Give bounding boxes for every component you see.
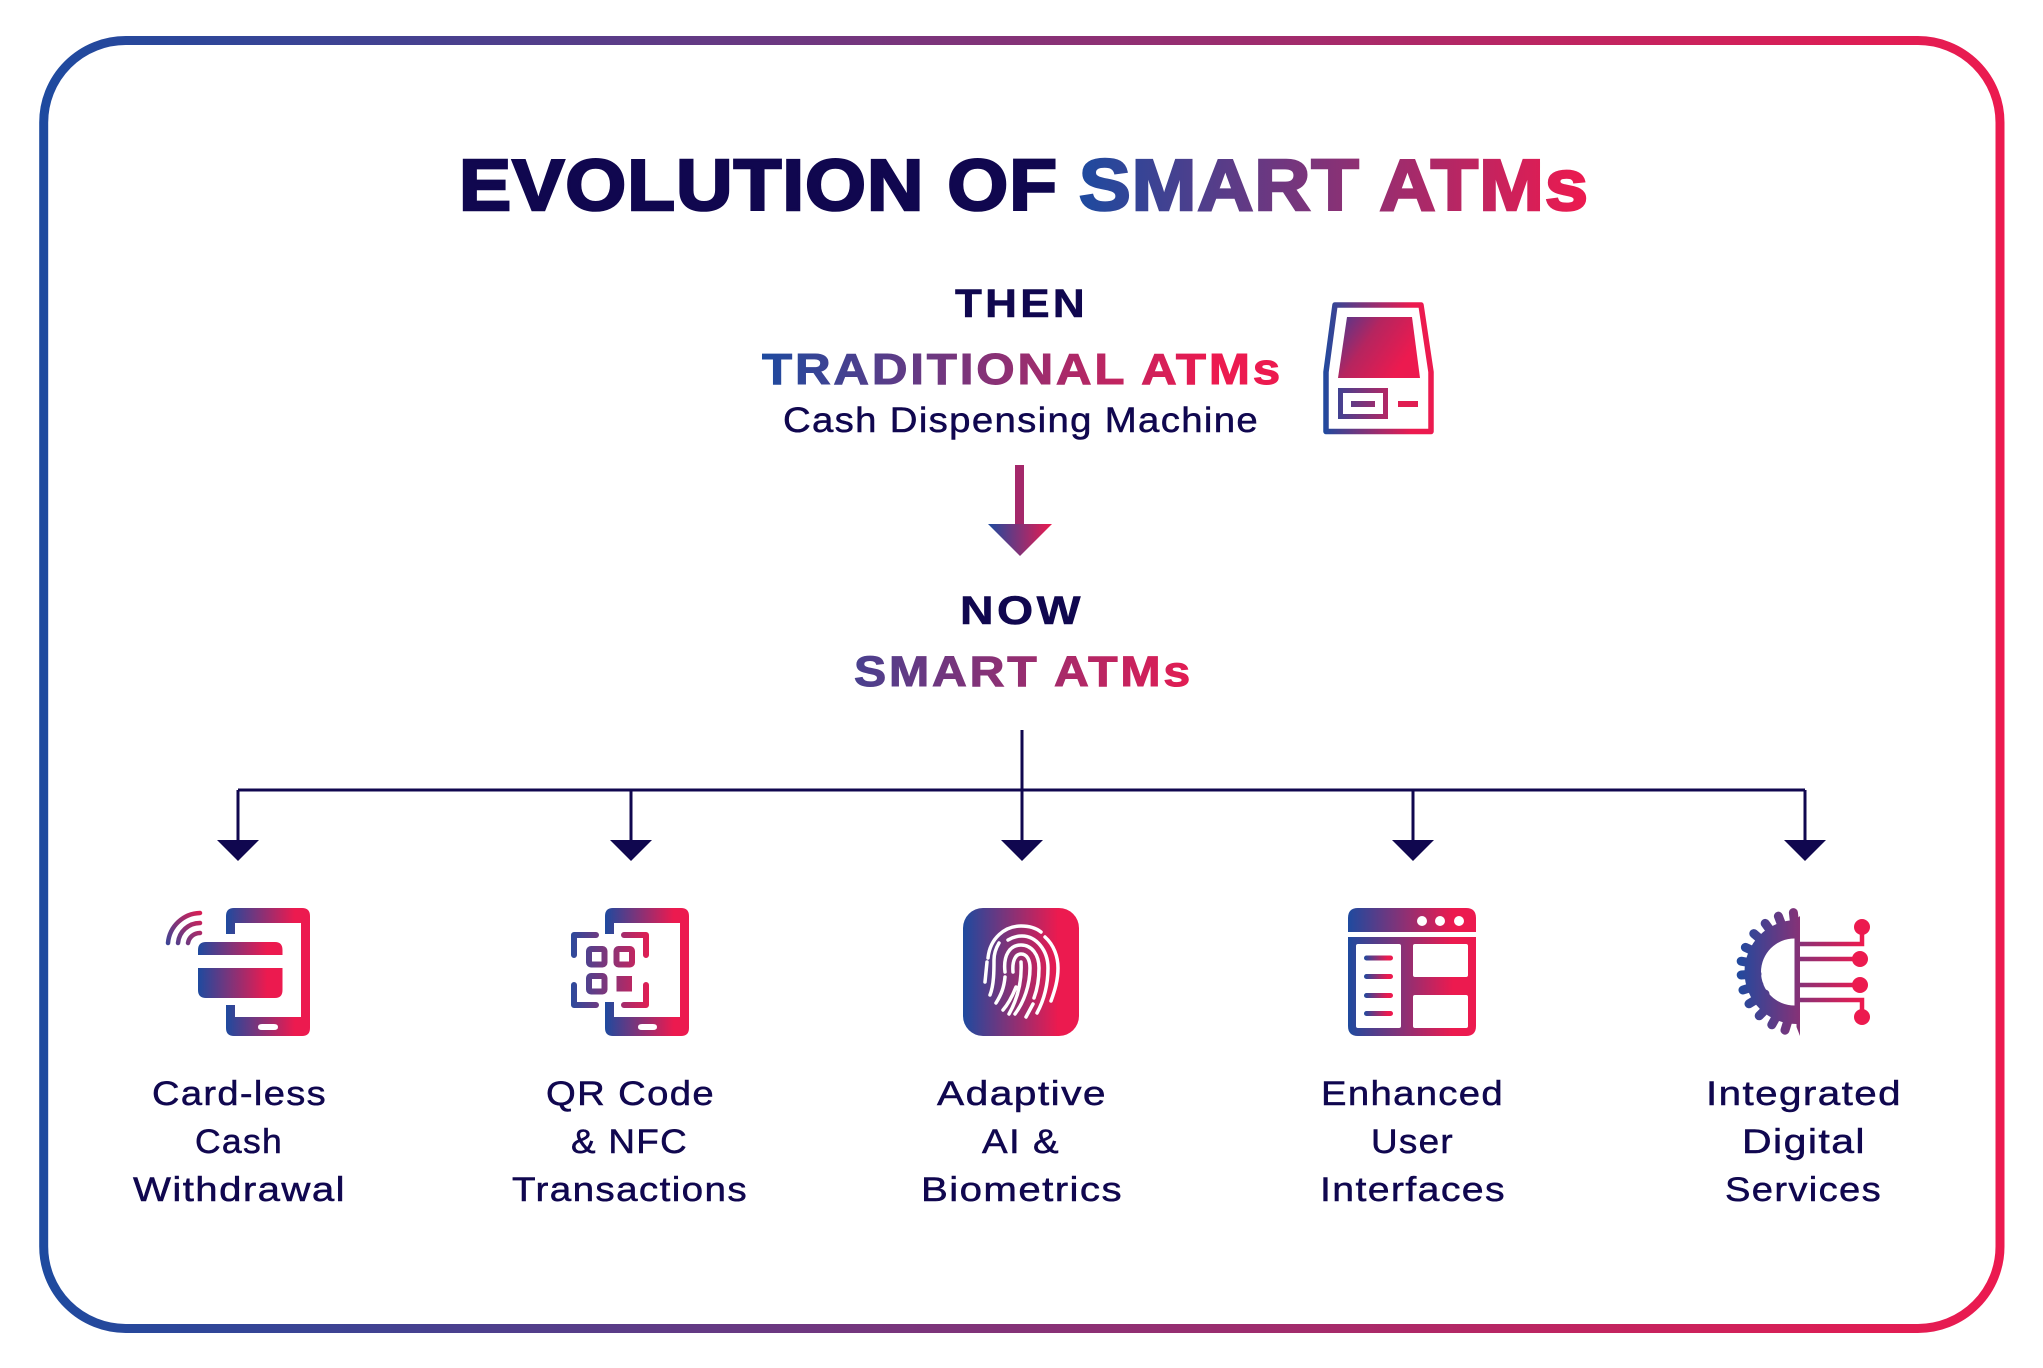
label: integrated digital services bbox=[1706, 1075, 1902, 1209]
icon: traditional ATM machine bbox=[1326, 305, 1431, 432]
label: card-less cash withdrawal: Cash bbox=[195, 1123, 283, 1161]
label: enhanced user interfaces: Enhanced bbox=[1321, 1075, 1504, 1113]
label: integrated digital services: Integrated bbox=[1706, 1075, 1902, 1113]
then: traditional ATMs text block: TRADITIONAL ATMs bbox=[762, 345, 1283, 394]
label: enhanced user interfaces: User bbox=[1371, 1123, 1454, 1161]
label: enhanced user interfaces bbox=[1320, 1075, 1506, 1209]
title bbox=[459, 146, 1589, 226]
then: traditional ATMs text block bbox=[762, 282, 1283, 440]
label: integrated digital services: Services bbox=[1725, 1171, 1882, 1209]
label: card-less cash withdrawal: Card-less bbox=[152, 1075, 327, 1113]
now: smart ATMs text block bbox=[854, 589, 1193, 696]
then: traditional ATMs text block: Cash Dispensing Machine bbox=[783, 401, 1259, 440]
label: adaptive AI and biometrics: AI & bbox=[982, 1123, 1060, 1161]
label: adaptive AI and biometrics: Biometrics bbox=[921, 1171, 1123, 1209]
now: smart ATMs text block: SMART ATMs bbox=[854, 648, 1193, 696]
label: integrated digital services: Digital bbox=[1742, 1123, 1866, 1161]
icon: card-less cash withdrawal phone and card bbox=[168, 908, 310, 1036]
label: enhanced user interfaces: Interfaces bbox=[1320, 1171, 1506, 1209]
then: traditional ATMs text block: THEN bbox=[955, 282, 1088, 326]
title: SMART ATMs bbox=[1079, 146, 1589, 226]
now: smart ATMs text block: NOW bbox=[960, 589, 1084, 633]
title: EVOLUTION OF bbox=[459, 146, 1058, 226]
icon: enhanced user interface browser window bbox=[1348, 908, 1476, 1036]
arrow: then to now bbox=[988, 465, 1052, 556]
icon: QR code phone bbox=[574, 908, 689, 1036]
icon: integrated digital services gear and circuit bbox=[1741, 913, 1870, 1036]
label: QR code and NFC transactions: QR Code bbox=[546, 1075, 715, 1113]
label: adaptive AI and biometrics: Adaptive bbox=[937, 1075, 1107, 1113]
label: adaptive AI and biometrics bbox=[921, 1075, 1123, 1209]
label: QR code and NFC transactions: & NFC bbox=[571, 1123, 688, 1161]
label: QR code and NFC transactions: Transactions bbox=[512, 1171, 748, 1209]
label: card-less cash withdrawal: Withdrawal bbox=[133, 1171, 346, 1209]
icon: fingerprint biometrics bbox=[963, 908, 1079, 1036]
tree connector with five arrows bbox=[217, 730, 1826, 861]
label: QR code and NFC transactions bbox=[512, 1075, 748, 1209]
label: card-less cash withdrawal bbox=[133, 1075, 346, 1209]
